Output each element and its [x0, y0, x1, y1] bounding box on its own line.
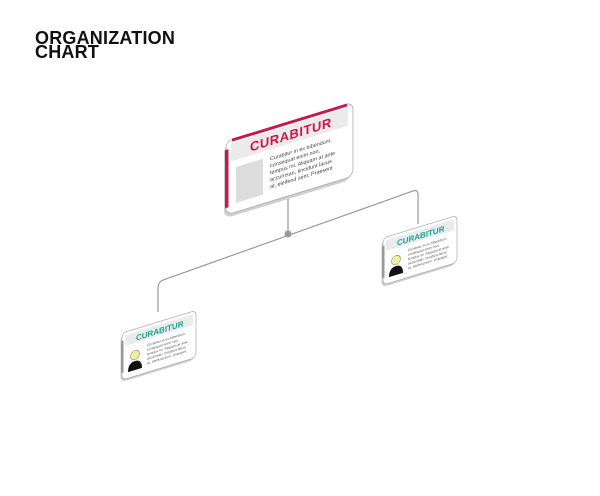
title: CHART: [35, 42, 99, 62]
main card text: consequat enim non,: [270, 148, 321, 170]
left card: CURABITUR: [136, 319, 184, 343]
main card text: at, eleifend sem. Praesent: [270, 165, 333, 191]
right card: consequat enim non,: [408, 243, 440, 257]
main card heading: CURABITUR: [250, 115, 332, 155]
right card avatar: [389, 253, 403, 277]
connector lines: [158, 190, 418, 312]
left card: Curabitur in ex bibendum,: [147, 332, 186, 347]
right card: at, eleifend sem. Praesent: [408, 254, 447, 270]
right card: CURABITUR: [397, 224, 445, 248]
main card: [224, 102, 353, 219]
main card text: accumsan, tincidunt lacus: [270, 159, 332, 184]
main card text: Curabitur in ex bibendum,: [270, 138, 332, 163]
left card: tempus mi. Aliquam at ante: [147, 340, 188, 356]
title: ORGANIZATION: [35, 28, 175, 48]
right card: accumsan, tincidunt lacus: [408, 250, 447, 266]
title: [35, 28, 175, 62]
right card: Curabitur in ex bibendum,: [408, 237, 447, 252]
left card: accumsan, tincidunt lacus: [147, 345, 186, 361]
main card text: tempus mi. Aliquam at ante: [270, 151, 335, 177]
main card text: [270, 137, 335, 191]
right card: tempus mi. Aliquam at ante: [408, 245, 449, 261]
left card avatar: [128, 348, 142, 372]
left card: consequat enim non,: [147, 338, 179, 352]
left card: at, eleifend sem. Praesent: [147, 349, 186, 365]
main card photo placeholder: [236, 159, 263, 203]
left card: [120, 310, 196, 382]
connector node: [284, 230, 292, 238]
right card: [382, 215, 457, 287]
